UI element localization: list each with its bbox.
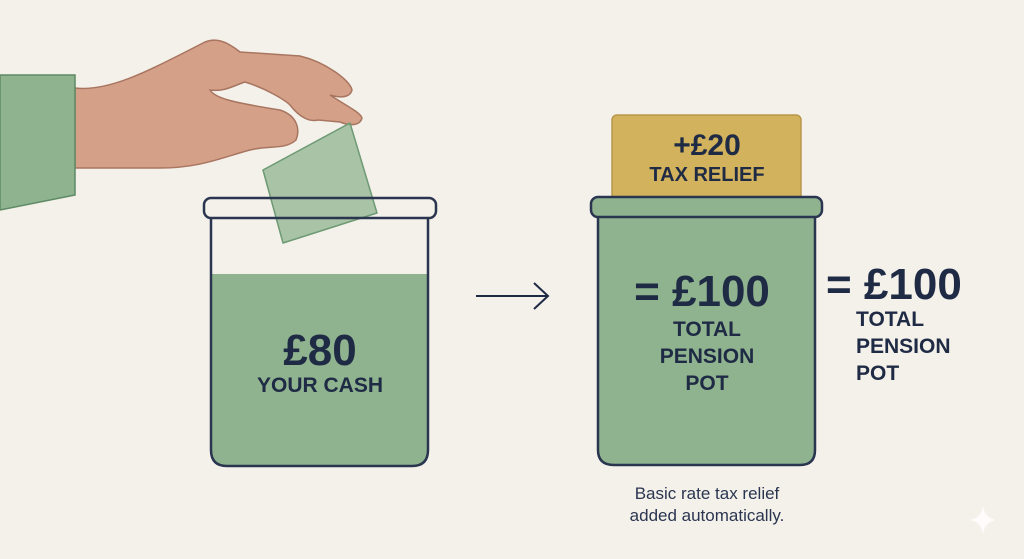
tax relief card: TAX RELIEF [649,164,765,186]
jar: total pension pot: PENSION [660,345,754,368]
result text: TOTAL [856,308,924,331]
icon: cash note [263,123,377,243]
caption: Basic rate tax relief [635,484,780,503]
icon: sparkle [970,506,996,534]
tax relief card [612,115,801,205]
jar: total pension pot: = £100 [634,267,770,316]
result text: PENSION [856,335,951,358]
caption [630,484,784,525]
tax relief card: +£20 [673,129,741,162]
jar: total pension pot: TOTAL [673,318,741,341]
arrow [476,283,548,309]
result text: = £100 [826,260,962,309]
jar: total pension pot: POT [685,372,729,395]
jar: total pension pot [591,115,822,465]
caption: added automatically. [630,506,784,525]
icon: hand with sleeve [0,40,362,210]
result text [826,260,962,385]
jar: your cash: YOUR CASH [257,374,383,397]
jar: your cash: £80 [283,326,357,375]
jar: your cash [204,123,436,466]
result text: POT [856,362,899,385]
